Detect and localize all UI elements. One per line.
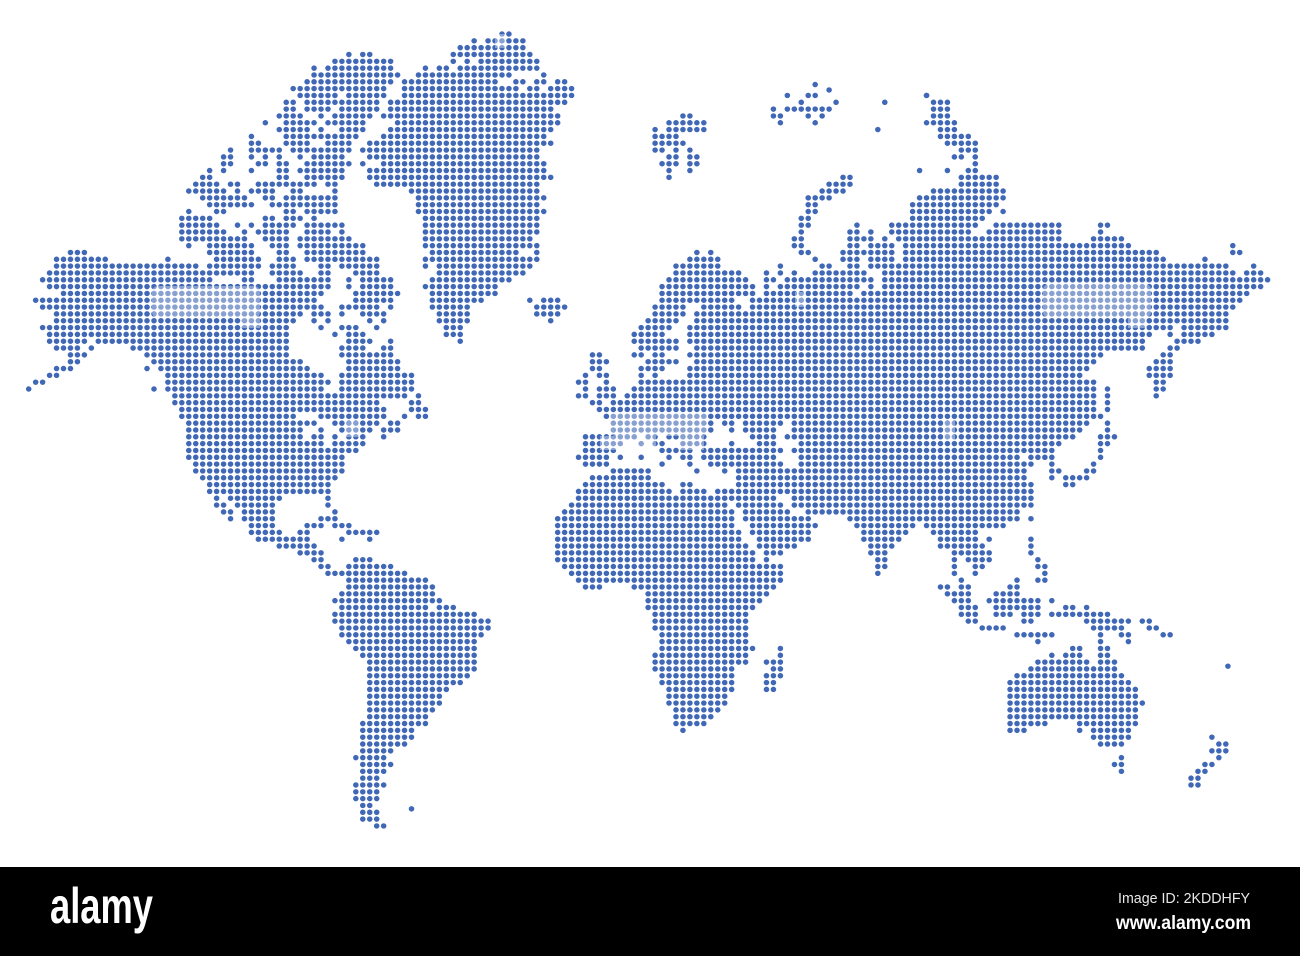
watermark lightening patches [152, 34, 1151, 450]
footer bar [0, 867, 1300, 956]
dotted world map [29, 34, 1271, 826]
map region: North and Central America [29, 54, 429, 573]
footer image id: Image ID: 2KDDHFY [1118, 890, 1250, 907]
map region: South America [335, 560, 492, 826]
footer logo: alamy: alamy [50, 878, 153, 934]
map region: Iceland [530, 300, 568, 321]
footer website: www.alamy.com [1115, 913, 1251, 934]
map region: Southeast Asia and Oceania [940, 580, 1231, 785]
map region: Greenland [363, 34, 575, 341]
map region: Arctic islands [655, 85, 930, 259]
map region: Eurasia and Africa [558, 95, 1271, 730]
